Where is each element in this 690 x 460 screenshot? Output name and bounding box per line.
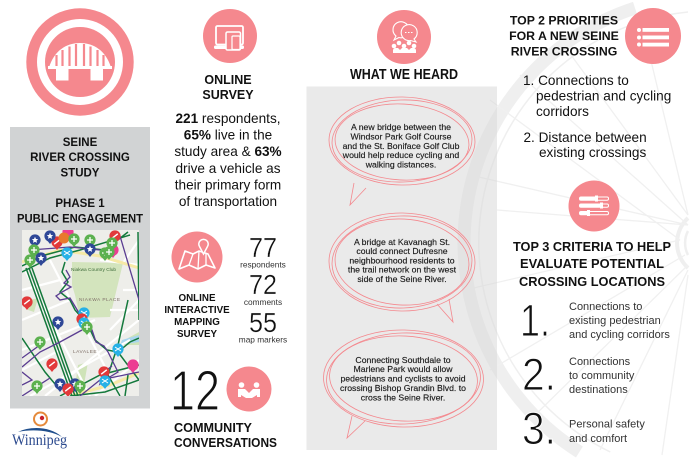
heading: online interactive mapping survey: SURVEY <box>177 329 218 340</box>
callout: bubble one <box>328 96 476 205</box>
callout: bubble three: crossing Bishop Grandin Blvd. to <box>340 383 466 393</box>
criterion 2: 2. <box>522 349 556 400</box>
callout: bubble one: A new bridge between the <box>351 122 451 132</box>
heading: study title: STUDY <box>61 168 100 180</box>
callout: bubble one: walking distances. <box>365 160 436 170</box>
criterion 1: Connections to <box>569 301 642 313</box>
criterion 2: destinations <box>569 384 628 396</box>
map of study area <box>21 226 139 397</box>
map of study area: Niakwa Country Club <box>71 267 116 273</box>
criterion 2: to community <box>569 370 635 382</box>
callout: bubble two: neighbourhood residents to <box>349 256 455 266</box>
callout: bubble two: side of the Seine River. <box>357 274 447 284</box>
heading: top 2 priorities: RIVER CROSSING <box>511 44 617 58</box>
heading: study title: RIVER CROSSING <box>30 152 130 164</box>
heading: top 3 criteria: EVALUATE POTENTIAL <box>520 256 664 271</box>
callout: bubble one: would help reduce cycling and <box>342 150 459 160</box>
text: top 2 priorities list: existing crossings <box>539 145 646 160</box>
callout: bubble two: the trail network on the west <box>348 264 457 274</box>
heading: online interactive mapping survey: MAPPING <box>174 317 220 328</box>
icon: list <box>625 8 681 64</box>
heading: online survey: ONLINE <box>204 73 252 87</box>
logo: Winnipeg: Winnipeg <box>12 432 67 449</box>
callout: bubble three: Connecting Southdale to <box>355 355 451 365</box>
text: survey results: study area & 63% <box>174 144 282 159</box>
icon: folded map with pin <box>172 232 222 282</box>
text: top 2 priorities list: 2. Distance between <box>524 130 647 145</box>
callout: bubble two: could connect Dufresne <box>356 246 448 256</box>
criterion 3: 3. <box>522 403 556 454</box>
text: survey results <box>174 111 282 209</box>
callout: bubble three: Marlene Park would allow <box>354 364 453 374</box>
criterion 2: Connections <box>569 356 631 368</box>
text: survey results: drive a vehicle as <box>175 161 281 176</box>
stats: mapping survey numbers: comments <box>244 297 282 307</box>
stat: 12 community conversations: 12 <box>170 359 220 423</box>
logo: Winnipeg <box>12 412 67 449</box>
criterion 3: and comfort <box>569 433 627 445</box>
heading: study title: PHASE 1 <box>55 198 105 210</box>
icon: sliders <box>568 180 620 232</box>
stat: 12 community conversations: COMMUNITY <box>174 421 253 435</box>
heading: study title: PUBLIC ENGAGEMENT <box>17 214 143 226</box>
heading: online survey: SURVEY <box>202 88 254 102</box>
heading: study title <box>17 137 143 226</box>
text: survey results: 65% live in the <box>184 128 272 142</box>
stat: 12 community conversations <box>170 359 277 450</box>
stat: 12 community conversations: CONVERSATIONS <box>174 436 277 450</box>
stats: mapping survey numbers: map markers <box>239 334 287 344</box>
callout: bubble three: cross the Seine River. <box>361 392 445 402</box>
stats: mapping survey numbers: respondents <box>240 260 286 270</box>
heading: online interactive mapping survey <box>164 293 230 340</box>
icon: handshake <box>226 366 272 412</box>
text: top 2 priorities list: 1. Connections to <box>523 73 629 88</box>
background wheel <box>464 8 688 455</box>
criterion 3: Personal safety <box>569 418 645 430</box>
criterion 1: and cycling corridors <box>569 329 670 341</box>
heading: top 3 criteria <box>513 239 671 289</box>
icon: speech bubbles over crowd <box>377 10 431 64</box>
text: top 2 priorities list: pedestrian and cycling <box>536 88 671 104</box>
callout: bubble one: and the St. Boniface Golf Club <box>343 141 460 151</box>
map of study area: NIAKWA PLACE <box>79 297 121 303</box>
text: survey results: 221 respondents, <box>175 111 281 126</box>
criterion 1 <box>520 295 670 346</box>
stats: mapping survey numbers: 77 <box>249 232 277 263</box>
heading: top 2 priorities <box>509 14 619 58</box>
heading: study title: SEINE <box>63 137 98 149</box>
criterion 1: 1. <box>520 295 550 346</box>
callout: bubble two <box>328 212 476 322</box>
callout: bubble one: Windsor Park Golf Course <box>351 132 452 142</box>
heading: top 3 criteria: CROSSING LOCATIONS <box>519 274 665 289</box>
map of study area: LAVALEE <box>73 349 97 355</box>
stats: mapping survey numbers <box>239 232 287 344</box>
heading: online interactive mapping survey: ONLINE <box>178 293 216 304</box>
heading: top 3 criteria: TOP 3 CRITERIA TO HELP <box>513 239 671 254</box>
icon: bridge badge <box>26 8 134 116</box>
panel: what we heard <box>306 86 497 450</box>
criterion 2 <box>522 349 635 400</box>
text: survey results: of transportation <box>179 194 277 209</box>
stats: mapping survey numbers: 55 <box>249 307 277 338</box>
callout: bubble two: A bridge at Kavanagh St. <box>354 237 450 247</box>
callout: bubble three <box>323 329 484 438</box>
callout: bubble three: pedestrians and cyclists to avoid <box>340 374 466 384</box>
heading: online interactive mapping survey: INTERACTIVE <box>164 305 230 316</box>
heading: top 2 priorities: TOP 2 PRIORITIES <box>510 14 618 28</box>
text: top 2 priorities list <box>523 73 671 160</box>
stats: mapping survey numbers: 72 <box>249 269 277 300</box>
criterion 1: existing pedestrian <box>569 315 661 327</box>
heading: top 2 priorities: FOR A NEW SEINE <box>509 29 619 43</box>
panel: study title and map <box>10 127 150 408</box>
text: top 2 priorities list: corridors <box>536 104 589 119</box>
icon: online survey devices <box>203 9 257 63</box>
heading: online survey <box>202 73 254 102</box>
heading: what we heard: WHAT WE HEARD <box>350 67 458 83</box>
criterion 3 <box>522 403 645 454</box>
text: survey results: their primary form <box>175 178 281 192</box>
